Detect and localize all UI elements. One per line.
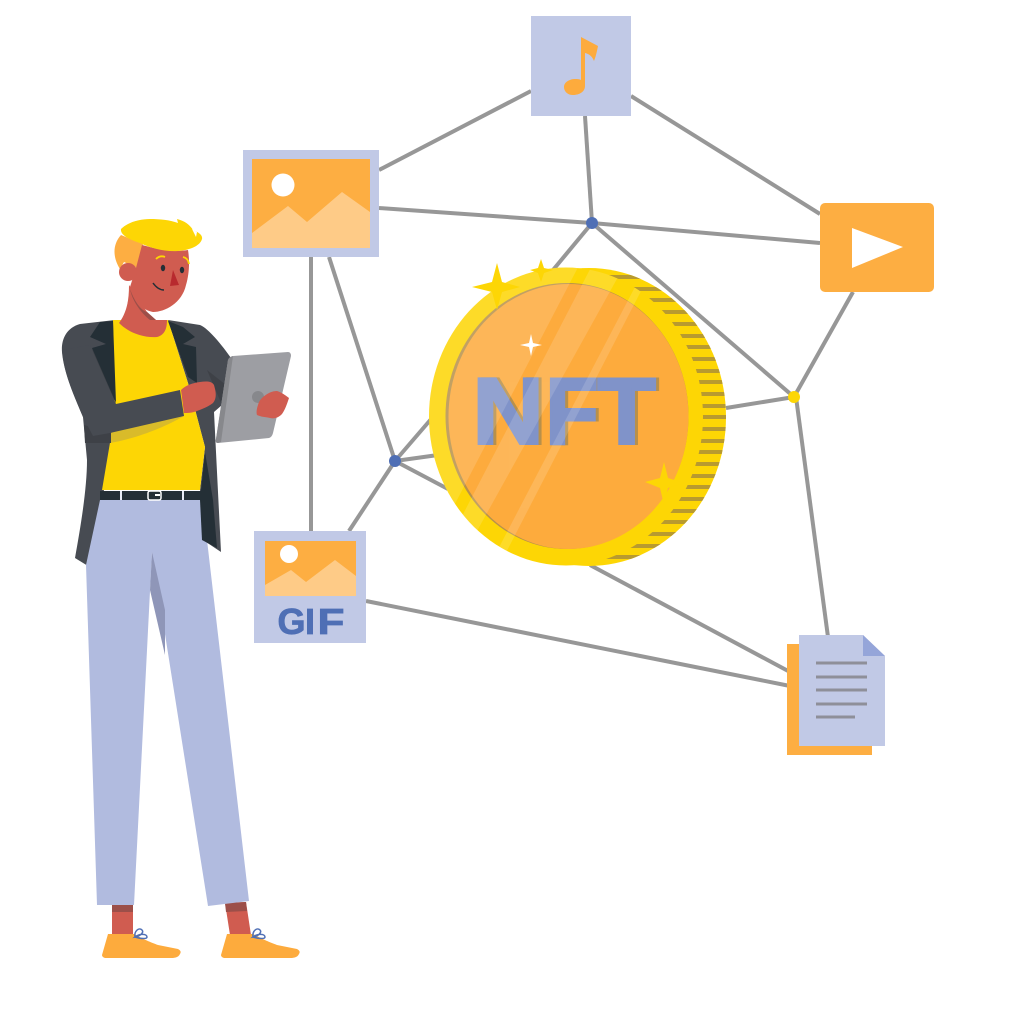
back leg sock left [112, 903, 133, 936]
hair top [121, 219, 202, 251]
icon: GIF file: G [278, 601, 306, 642]
icon: document file [787, 635, 885, 755]
hair highlight notch [192, 229, 197, 237]
icon: GIF file [254, 531, 366, 643]
icon: image file [243, 150, 379, 257]
coin edge with ridges [574, 268, 726, 566]
face [130, 245, 189, 312]
sock right [225, 902, 251, 935]
tablet button [252, 391, 264, 403]
coin glare stripes [429, 268, 640, 551]
sock shadow left [112, 903, 133, 912]
trousers [86, 500, 249, 906]
icon: GIF file: F [318, 601, 344, 642]
tablet [216, 352, 291, 443]
jacket right front panel [168, 320, 231, 552]
eye right [180, 267, 184, 273]
left lace [135, 929, 147, 938]
sparkle: large top left [472, 263, 520, 310]
jacket left panel [62, 320, 116, 566]
person holding tablet [62, 219, 300, 958]
back hair [114, 235, 143, 269]
lapel right [168, 321, 197, 383]
coin inner shadow ring [446, 283, 688, 549]
network node: top blue [586, 217, 598, 229]
ear [119, 263, 137, 281]
icon: video file [820, 203, 934, 292]
sparkle: small top [530, 259, 553, 282]
network connection lines [311, 91, 853, 686]
infographic canvas [62, 16, 934, 958]
pointing hand [181, 381, 216, 413]
nose [170, 270, 179, 286]
shirt shadow under arm [110, 416, 184, 443]
sock shadow right [225, 902, 247, 912]
NFT label: T [598, 358, 656, 464]
coin inner face [448, 284, 688, 549]
lapel left [90, 321, 116, 403]
sleeve shadow [84, 425, 111, 443]
belt [100, 491, 201, 500]
shirt [102, 320, 205, 490]
network node: left blue [389, 455, 401, 467]
NFT label: F [546, 358, 598, 464]
neck [119, 285, 167, 337]
eyebrows [156, 256, 189, 264]
neck shadow [130, 289, 156, 320]
lapel shadow left [92, 348, 115, 400]
NFT label shadow: F [548, 358, 602, 464]
NFT label shadow: T [601, 358, 659, 464]
right lace [253, 929, 265, 938]
icon: music file [531, 16, 631, 116]
jacket sleeve [62, 345, 184, 436]
smile [153, 283, 164, 290]
tablet hand [257, 391, 289, 418]
right shoe [221, 934, 300, 958]
network node: right yellow [788, 391, 800, 403]
tablet edge [216, 356, 233, 443]
icon: GIF file: I [305, 601, 315, 642]
NFT label shadow: N [476, 358, 547, 464]
jacket inner lining right [200, 452, 217, 548]
sparkle: lower right [645, 462, 684, 505]
sparkle: white [520, 334, 542, 356]
NFT coin [429, 259, 726, 566]
upper arm shadow [207, 370, 226, 405]
trouser shadow [150, 552, 165, 655]
coin face rim [429, 268, 703, 566]
left shoe [102, 934, 181, 958]
NFT label: N [473, 358, 544, 464]
eye left [161, 265, 165, 271]
